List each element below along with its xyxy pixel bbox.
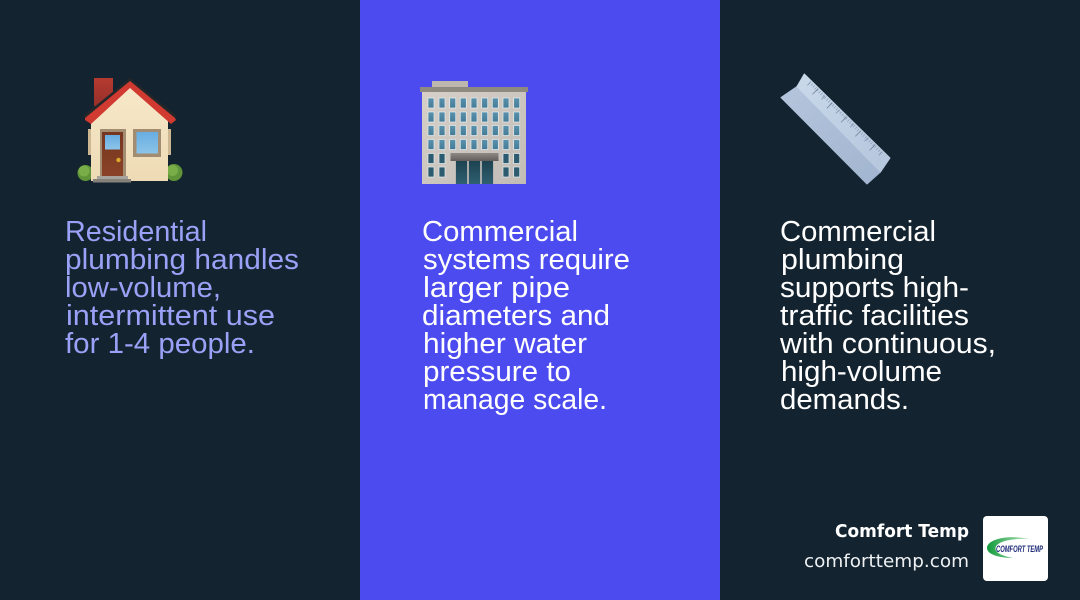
text: commercial systems description: systems require [423,244,630,276]
logo: Comfort Temp: COMFORT TEMP [996,544,1044,554]
text: commercial facilities description: plumbing [781,244,904,276]
icon: ruler [781,74,890,184]
footer: website: comforttemp.com [804,552,969,572]
text: residential description: low-volume, [65,272,221,304]
text: commercial systems description: Commercial [422,216,578,248]
text: commercial facilities description: traffic facilities [780,300,969,332]
text: commercial facilities description: supports high- [780,272,969,304]
text: commercial systems description: pressure to [423,356,571,388]
text: commercial systems description: diameters and [422,300,610,332]
panel: residential [0,0,360,600]
panel: commercial systems [360,0,720,600]
text: commercial facilities description: Commercial [780,216,936,248]
text: commercial systems description: manage scale. [423,384,607,416]
text: residential description [65,216,299,360]
footer: brand name: Comfort Temp [835,522,969,542]
text: residential description: plumbing handles [65,244,299,276]
text: commercial systems description [422,216,630,416]
text: residential description: intermittent use [66,300,275,332]
text: commercial facilities description: high-volume [781,356,942,388]
icon: office building [420,81,528,184]
text: commercial systems description: larger pipe [423,272,570,304]
icon: house [78,78,182,182]
logo: Comfort Temp [983,516,1048,581]
panel: commercial facilities [720,0,1080,600]
text: residential description: Residential [65,216,207,248]
text: residential description: for 1-4 people. [65,328,255,360]
text: commercial facilities description [779,216,996,416]
text: commercial systems description: higher water [423,328,588,360]
text: commercial facilities description: with continuous, [779,328,996,360]
text: commercial facilities description: demands. [780,384,909,416]
